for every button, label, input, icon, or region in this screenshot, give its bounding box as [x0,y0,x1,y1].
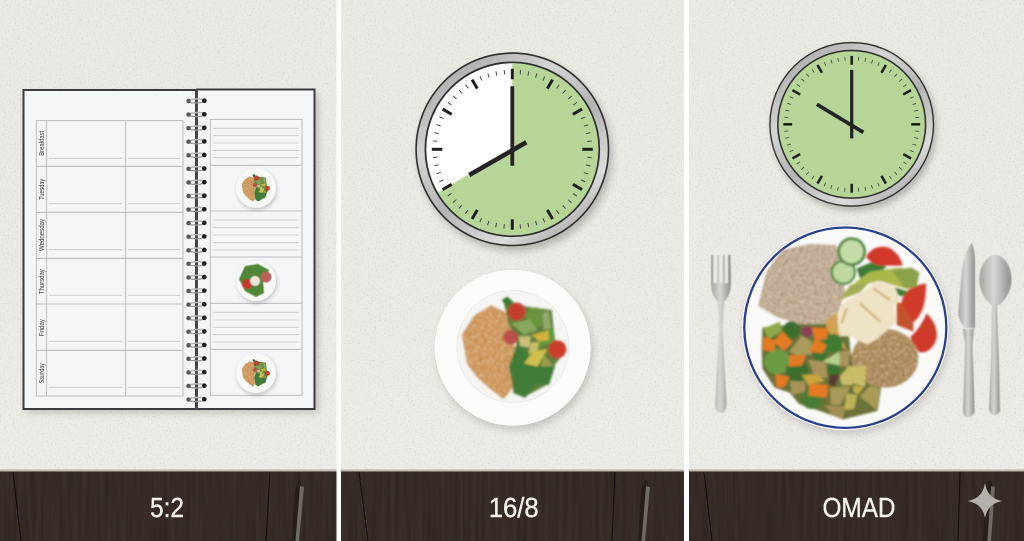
icon: spoon [979,255,1012,415]
breaded patty [852,329,918,388]
cabinet [689,470,1024,541]
countertop background [0,0,336,471]
food [760,237,937,418]
meal icon: Saunday plate [236,353,277,395]
vegetables [763,322,782,339]
countertop background [341,0,684,471]
green sector [438,63,598,235]
spiral binding [186,98,207,402]
clock hands [817,70,863,138]
panel: 5:2 [0,0,336,541]
plate: large one meal a day [742,225,950,434]
notebook [24,89,318,412]
day labels: Thursday [39,269,46,294]
cabinet [0,470,336,541]
plate: single meal [435,270,593,430]
label: 16/8: 16/8 [489,492,539,523]
clock hands [469,86,526,175]
countertop background [689,0,1024,471]
label: 5:2: 5:2 [150,492,184,523]
label: OMAD: OMAD [822,492,896,523]
clock: one-hour eating window [769,42,937,211]
carrots [763,328,828,398]
icon: sparkle watermark [968,483,1002,518]
left page [24,90,196,409]
day labels: Saunday [39,363,46,383]
panel: 16/8 [341,0,684,541]
panel: OMAD [689,0,1024,541]
day labels: Friday [39,319,46,336]
icon: fork [711,255,731,413]
rice [760,246,843,327]
right page [197,90,314,409]
meal icon: Tuesday plate [236,168,277,210]
cabinet [341,470,684,541]
clock: 16 hours fasting, 8 hours eating window [415,52,612,251]
day labels: Breakfast [39,131,46,156]
potatoes [789,336,812,355]
day labels: Wednesday [39,219,46,251]
right lined table [210,119,302,395]
avocado [854,268,919,289]
vegetable bed [763,325,880,418]
left weekly table [36,121,183,396]
icon: knife [958,243,975,417]
grilled chicken [837,282,899,343]
meal icon: Thursday salad [236,261,277,303]
day labels [39,131,46,383]
day labels: Tuesday [39,178,46,200]
cucumber slices [831,260,856,285]
tomato slices [866,247,903,266]
